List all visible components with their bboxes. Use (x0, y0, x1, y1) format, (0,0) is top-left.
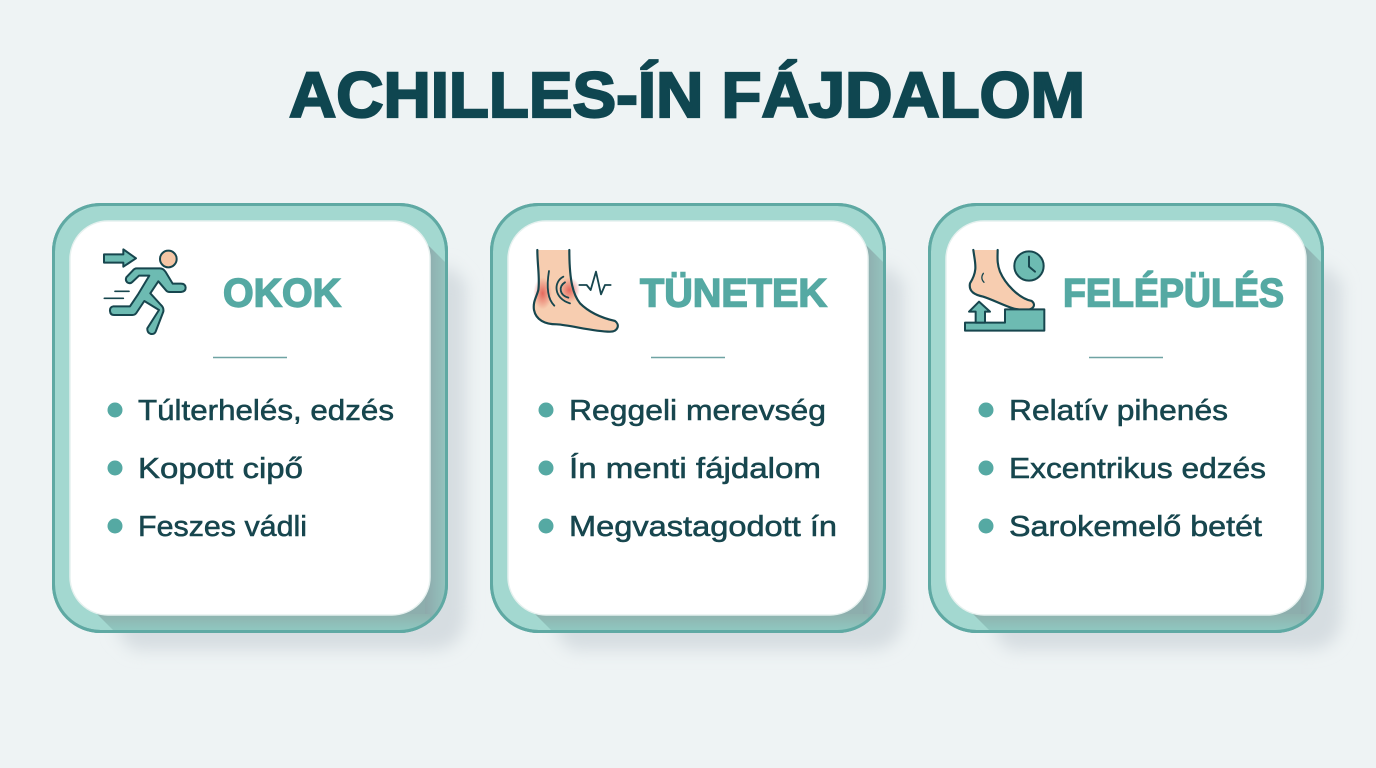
list: felépülés (978, 395, 1266, 543)
list: felépülés: Excentrikus edzés (1009, 453, 1266, 485)
icon: foot on heel lift with clock (965, 250, 1044, 331)
card frame: tünetek (492, 204, 904, 650)
heading: tünetek: TÜNETEK (640, 270, 827, 316)
list: felépülés: Sarokemelő betét (1009, 511, 1262, 543)
list: okok: Túlterhelés, edzés (138, 395, 394, 427)
panel: tünetek (492, 204, 904, 650)
list: tünetek: Ín menti fájdalom (569, 452, 821, 485)
list: okok (108, 395, 394, 543)
title: ACHILLES-ÍN FÁJDALOM (289, 59, 1085, 131)
list: okok: Feszes vádli (138, 511, 307, 543)
list: tünetek: Megvastagodott ín (569, 511, 837, 543)
panel: okok (54, 204, 466, 650)
card frame: felépülés (930, 204, 1342, 650)
card frame: okok (54, 204, 466, 650)
icon: runner (104, 249, 186, 334)
panel: felépülés (930, 204, 1342, 650)
icon: painful ankle (533, 250, 618, 332)
list: okok: Kopott cipő (138, 453, 303, 485)
heading: okok: OKOK (223, 272, 341, 316)
list: tünetek: Reggeli merevség (569, 395, 826, 427)
list: tünetek (538, 395, 837, 543)
list: felépülés: Relatív pihenés (1009, 395, 1228, 427)
heading: felépülés: FELÉPÜLÉS (1063, 270, 1284, 316)
